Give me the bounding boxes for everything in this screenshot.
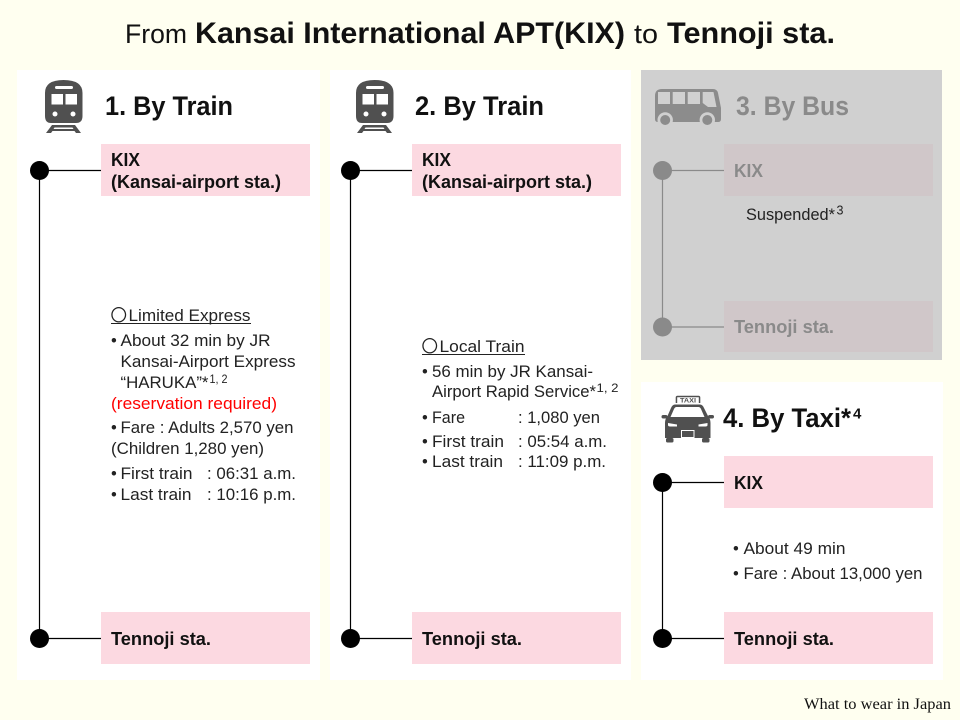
details: local train: 1, 2 [596, 381, 619, 395]
details: local train: • [422, 363, 428, 381]
details: time and fare: About 49 min [744, 540, 846, 558]
status: suspended: Suspended* [746, 206, 836, 224]
details: limited express: 1, 2 [210, 372, 228, 386]
details: local train: • [422, 433, 428, 451]
details: time and fare: Fare : About 13,000 yen [744, 565, 922, 583]
details: time and fare [733, 540, 922, 583]
details: local train: Airport Rapid Service* [432, 383, 597, 401]
details: limited express: (Children 1,280 yen) [111, 440, 264, 458]
heading: 3. By Bus [736, 91, 849, 121]
station: KIX [412, 144, 621, 196]
panel: route 3 by bus (suspended) [641, 70, 942, 360]
details: local train: 〇 [422, 333, 438, 357]
station: KIX: KIX [422, 149, 452, 170]
heading: 2. By Train [415, 91, 544, 121]
details: limited express: : 06:31 a.m. [207, 465, 296, 483]
details: limited express: • [111, 419, 117, 437]
heading: 1. By Train [105, 91, 233, 121]
station: Tennoji [412, 612, 621, 664]
details: limited express: About 32 min by JR [120, 332, 271, 350]
title: to [634, 19, 658, 49]
details: local train: 56 min by JR Kansai- [432, 363, 593, 381]
details: local train: Fare [432, 409, 465, 427]
details: local train: First train [432, 433, 504, 451]
station: KIX: KIX [734, 160, 764, 181]
icon: train [356, 80, 394, 133]
icon: taxi [662, 396, 714, 442]
station: KIX: KIX [734, 472, 764, 493]
icon: taxi: TAXI [680, 398, 696, 404]
details: limited express: Limited Express [128, 307, 250, 325]
details: limited express [110, 302, 296, 504]
icon: bus [655, 89, 721, 128]
details: local train: : 1,080 yen [518, 409, 600, 427]
station: KIX: KIX [111, 149, 141, 170]
details: local train [422, 333, 619, 471]
details: limited express: First train [120, 465, 192, 483]
title: Tennoji sta. [667, 17, 835, 50]
title [125, 17, 835, 50]
station: Tennoji: Tennoji sta. [734, 316, 834, 337]
details: limited express: “HARUKA”* [120, 374, 209, 392]
title: Kansai International APT(KIX) [195, 17, 625, 50]
route line [30, 161, 101, 648]
station: Tennoji: Tennoji sta. [111, 628, 211, 649]
details: limited express: Last train [120, 486, 192, 504]
station: KIX [724, 144, 933, 196]
details: limited express: • [111, 486, 117, 504]
details: local train: : 05:54 a.m. [518, 433, 607, 451]
panel: route 2 by train [330, 70, 631, 680]
station: Tennoji [101, 612, 310, 664]
panel: route 1 by train [17, 70, 320, 680]
title: From [125, 19, 187, 49]
route line [653, 473, 724, 648]
details: limited express: (reservation required) [111, 395, 277, 413]
station: Tennoji: Tennoji sta. [734, 628, 834, 649]
status: suspended: 3 [836, 204, 844, 218]
station: KIX [724, 456, 933, 508]
station: KIX: (Kansai-airport sta.) [111, 171, 281, 192]
details: local train: • [422, 453, 428, 471]
route line [653, 161, 724, 336]
station: KIX: (Kansai-airport sta.) [422, 171, 592, 192]
details: local train: : 11:09 p.m. [518, 453, 606, 471]
details: local train: Local Train [440, 338, 524, 356]
heading: 4. By Taxi* [723, 403, 851, 433]
details: time and fare: • [733, 565, 739, 583]
details: limited express: • [111, 332, 117, 350]
station: Tennoji: Tennoji sta. [422, 628, 522, 649]
details: limited express: : 10:16 p.m. [207, 486, 296, 504]
details: limited express: • [111, 465, 117, 483]
icon: train [45, 80, 82, 133]
details: local train: Last train [432, 453, 503, 471]
details: local train: • [422, 409, 428, 427]
credit: What to wear in Japan [804, 696, 951, 713]
details: limited express: Fare : Adults 2,570 yen [120, 419, 294, 437]
station: KIX [101, 144, 310, 196]
panel: route 4 by taxi [641, 382, 943, 680]
station: Tennoji [724, 612, 933, 664]
route line [341, 161, 412, 648]
details: limited express: Kansai-Airport Express [120, 353, 296, 371]
heading: 4 [853, 406, 862, 422]
details: limited express: 〇 [110, 302, 127, 326]
details: time and fare: • [733, 540, 739, 558]
station: Tennoji [724, 301, 933, 352]
